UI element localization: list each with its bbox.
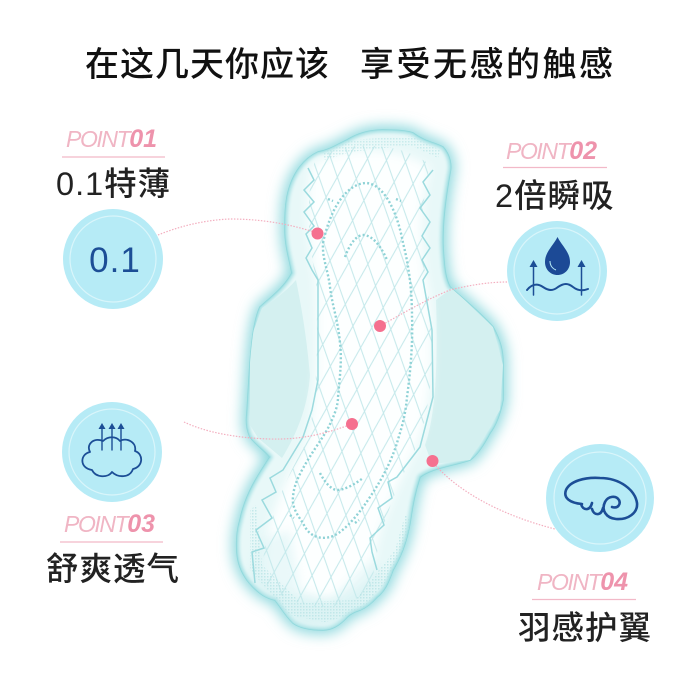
- point 02 heading: 2倍瞬吸: [495, 178, 615, 214]
- point 04 heading: 羽感护翼: [518, 610, 652, 646]
- quilted hem, top: [322, 136, 440, 160]
- title: 在这几天你应该: [85, 46, 330, 84]
- icon: 0.1 badge: 0.1: [89, 241, 141, 280]
- marker dots: [312, 228, 438, 467]
- icon: 0.1 badge: [63, 209, 163, 309]
- point 03: [46, 402, 180, 587]
- title: [85, 46, 616, 84]
- wavy channel lines: [252, 168, 433, 583]
- point 02 label: POINT02: [506, 137, 597, 165]
- point 04: [518, 444, 654, 646]
- title: 享受无感的触感: [360, 46, 616, 84]
- point 04 label: POINT04: [537, 568, 628, 596]
- pad outer glow: [237, 130, 503, 630]
- icon: water drop absorption: [507, 221, 607, 321]
- point 03 heading: 舒爽透气: [46, 551, 180, 587]
- dotted centre outline: [290, 183, 412, 538]
- point 02: [495, 137, 615, 321]
- pad body: [237, 130, 503, 630]
- dotted leader lines: [158, 219, 555, 529]
- pad details: [237, 130, 503, 630]
- left wing: [250, 280, 310, 458]
- quilted hem, bottom: [250, 505, 412, 622]
- product: sanitary pad: [237, 130, 503, 630]
- point 03 label: POINT03: [64, 510, 155, 538]
- icon: wing: [546, 444, 654, 552]
- point 01 heading: 0.1特薄: [56, 166, 171, 202]
- lattice: [262, 146, 432, 607]
- teal inner rim: [237, 130, 503, 630]
- right wing: [425, 288, 503, 464]
- lower shadow tint: [254, 532, 380, 625]
- icon: breathable cloud: [62, 402, 162, 502]
- point 01: [56, 125, 171, 309]
- soft white core: [262, 150, 432, 600]
- point 01 label: POINT01: [66, 125, 157, 153]
